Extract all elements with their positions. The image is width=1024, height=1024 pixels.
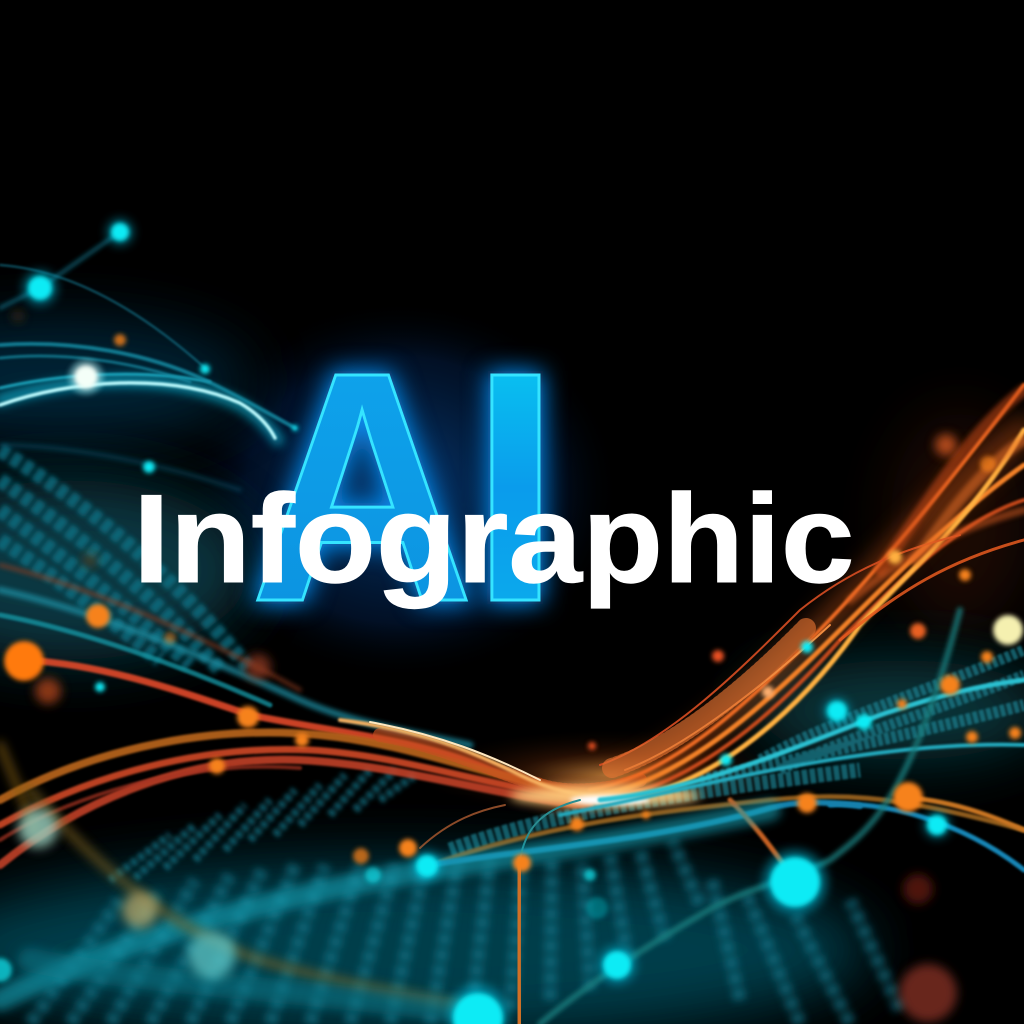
AI letters: A xyxy=(250,304,474,670)
nodes: cyan xyxy=(0,223,947,1024)
nodes: white xyxy=(18,359,1023,979)
nodes: orange xyxy=(4,334,1021,872)
streams: lower left teal and red xyxy=(0,565,640,865)
AI glow: I xyxy=(470,305,561,670)
title: Infographic: Infographic xyxy=(133,469,855,609)
nodes: cyan glow xyxy=(23,219,950,1024)
data texture: left wave xyxy=(0,450,250,670)
streams: upper left cyan xyxy=(0,232,295,490)
data texture: lower field xyxy=(30,770,900,1024)
nodes xyxy=(0,219,1023,1024)
bright centre flare xyxy=(510,785,700,807)
nodes: dim out of focus xyxy=(13,311,957,1022)
data texture: right wave xyxy=(450,650,1024,850)
background glow xyxy=(0,300,1024,1024)
streams: teal and blue lower right xyxy=(0,610,1024,1024)
AI letters: I xyxy=(470,305,561,670)
AI heading xyxy=(250,304,561,670)
streams: orange rising right xyxy=(560,385,1024,800)
AI glow: A xyxy=(250,304,474,670)
